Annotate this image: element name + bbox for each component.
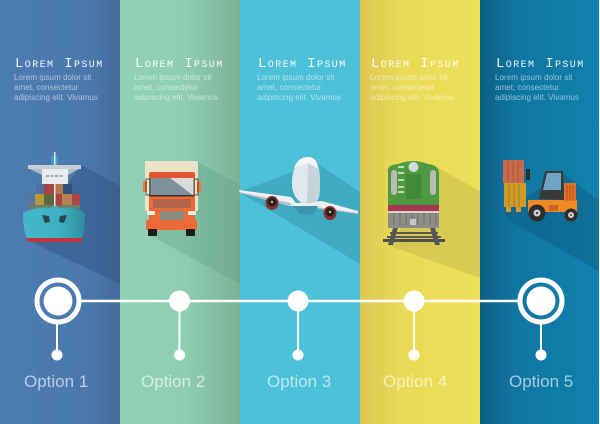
text block: option 4: amet, consectetur: [370, 83, 435, 92]
text block: option 5: amet, consectetur: [495, 83, 560, 92]
panel: option 1 background: [0, 0, 120, 424]
long shadow: forklift: [503, 173, 599, 271]
text block: option 5: adipiscing elit. Vivamus: [495, 93, 579, 102]
timeline node: option 3: [288, 290, 308, 360]
timeline: horizontal connector: [80, 300, 520, 302]
timeline node: option 5: [520, 280, 562, 360]
label: option 3: Option 3: [267, 372, 331, 391]
text block: option 1: amet, consectetur: [14, 83, 79, 92]
text block: option 3: adipiscing elit. Vivamus: [257, 93, 341, 102]
text block: option 1: Lorem Ipsum: [15, 56, 104, 72]
text block: option 1: Lorem ipsum dolor sit: [14, 73, 92, 82]
icon: locomotive train: [383, 161, 445, 245]
text block: option 3: Lorem Ipsum: [258, 56, 347, 72]
panel: option 5 background: [480, 0, 599, 424]
text block: option 2: Lorem Ipsum: [135, 56, 224, 72]
timeline node: option 2: [169, 290, 190, 360]
text block: option 1: adipiscing elit. Vivamus: [14, 93, 98, 102]
text block: option 2: [134, 56, 224, 102]
text block: option 2: amet, consectetur: [134, 83, 199, 92]
timeline node: option 1: [37, 280, 79, 360]
text block: option 4: [370, 56, 460, 102]
panel: option 3 background: [240, 0, 360, 424]
label: option 2: Option 2: [141, 372, 205, 391]
icon: forklift with containers: [503, 160, 578, 222]
text block: option 4: Lorem ipsum dolor sit: [370, 73, 448, 82]
text block: option 3: amet, consectetur: [257, 83, 322, 92]
long shadow: ship: [27, 165, 120, 284]
long shadow: truck: [153, 162, 240, 284]
text block: option 5: [495, 56, 585, 102]
text block: option 3: Lorem ipsum dolor sit: [257, 73, 335, 82]
text block: option 5: Lorem ipsum dolor sit: [495, 73, 573, 82]
label: option 1: Option 1: [24, 372, 88, 391]
text block: option 4: adipiscing elit. Vivamus: [370, 93, 454, 102]
text block: option 3: [257, 56, 347, 102]
text block: option 2: Lorem ipsum dolor sit: [134, 73, 212, 82]
icon: delivery truck: [143, 161, 201, 236]
text block: option 4: Lorem Ipsum: [371, 56, 460, 72]
text block: option 1: [14, 56, 104, 102]
timeline node: option 4: [404, 290, 424, 360]
text block: option 2: adipiscing elit. Vivamus: [134, 93, 218, 102]
panel: option 2 background: [120, 0, 240, 424]
icon: container ship: [23, 152, 85, 242]
label: option 5: Option 5: [509, 372, 573, 391]
long shadow: plane: [239, 163, 360, 264]
icon: airplane: [239, 157, 358, 220]
text block: option 5: Lorem Ipsum: [496, 56, 585, 72]
long shadow: train: [390, 168, 480, 278]
panel: option 4 background: [360, 0, 480, 424]
label: option 4: Option 4: [383, 372, 447, 391]
